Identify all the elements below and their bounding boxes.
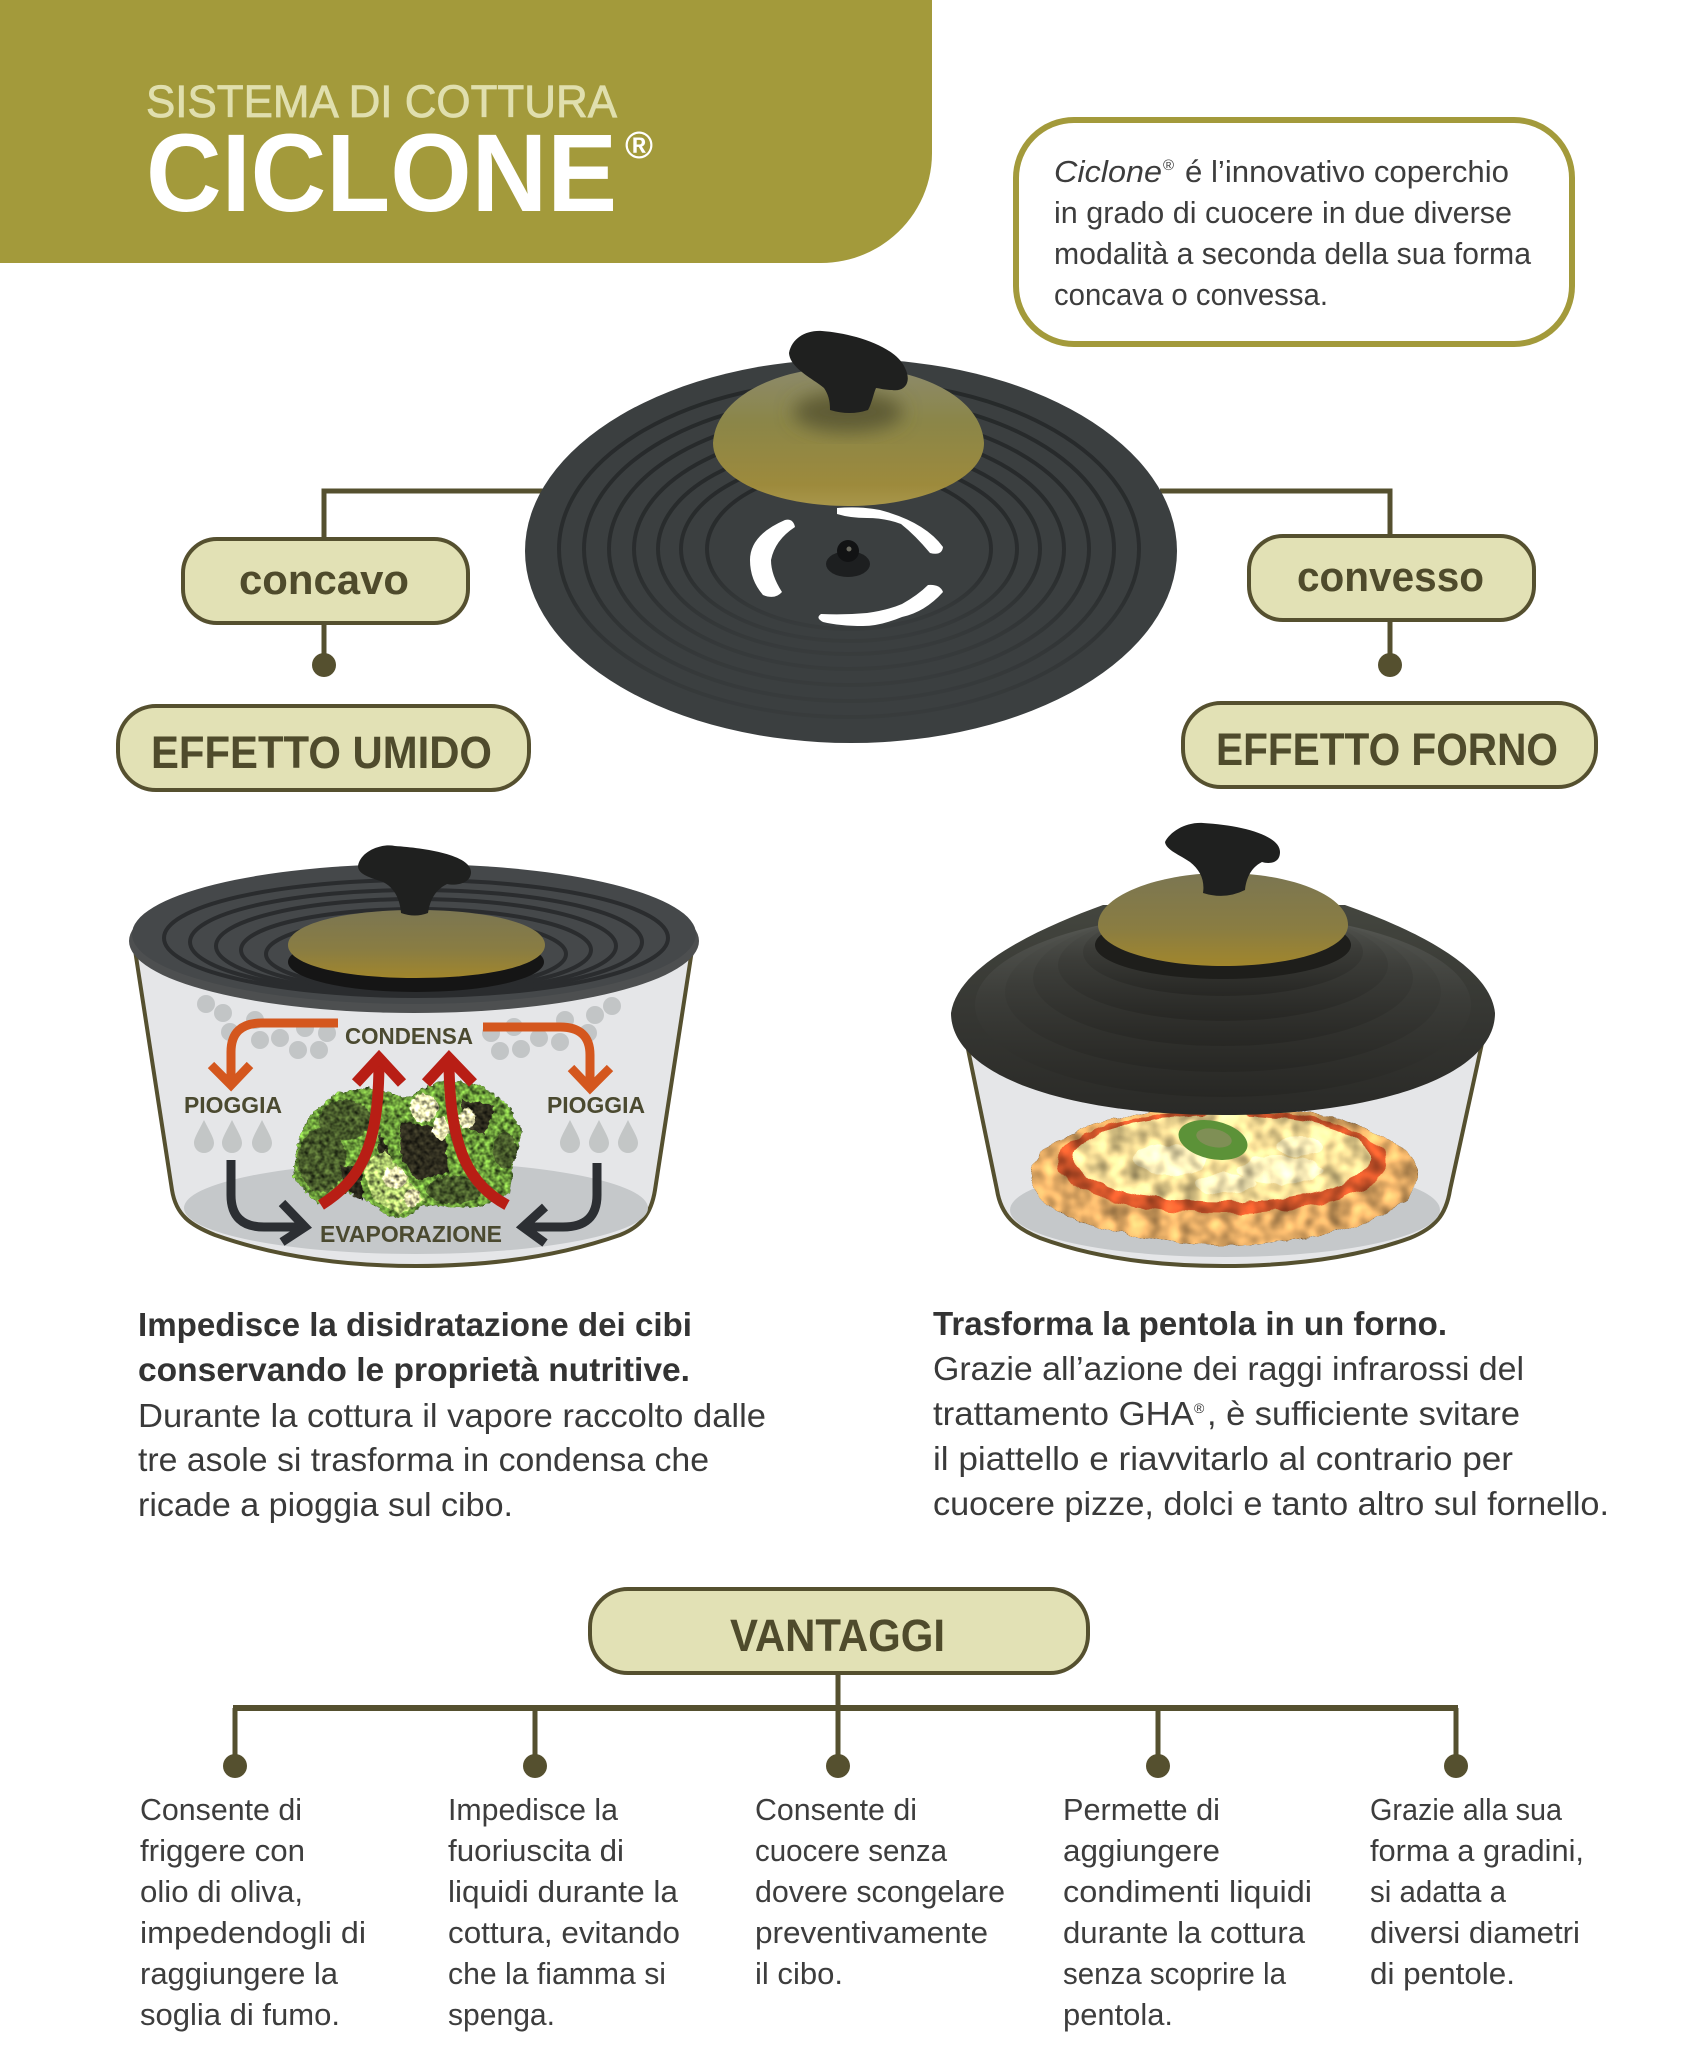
pill: convesso: convesso [1297, 553, 1484, 600]
advantage column 2: fuoriuscita di [448, 1833, 624, 1868]
pill: effetto forno [1183, 703, 1596, 787]
advantage column 1: olio di oliva, [140, 1874, 303, 1909]
plate [1010, 1163, 1440, 1257]
pill: concavo [183, 539, 468, 623]
text block: effetto forno: trattamento GHA [933, 1395, 1194, 1432]
advantage column 3 [755, 1792, 1005, 1991]
advantage column 3: il cibo. [755, 1956, 843, 1991]
advantage column 2: liquidi durante la [448, 1874, 679, 1909]
advantage column 3: dovere scongelare [755, 1874, 1005, 1909]
callout: intro text: concava o convessa. [1054, 277, 1328, 312]
title: ciclone: CICLONE [146, 112, 617, 235]
text block: effetto umido: conservando le proprietà nutritive. [138, 1351, 690, 1388]
steam slots [750, 507, 943, 626]
advantage column 2: che la fiamma si [448, 1956, 666, 1991]
advantage column 2: spenga. [448, 1997, 555, 2032]
advantage column 5: Grazie alla sua [1370, 1792, 1563, 1827]
text block: effetto forno: cuocere pizze, dolci e tanto altro sul fornello. [933, 1485, 1609, 1522]
advantage column 4: senza scoprire la [1063, 1956, 1287, 1991]
text block: effetto forno: Trasforma la pentola in un forno. [933, 1305, 1447, 1342]
pizza [1031, 1106, 1417, 1244]
advantage column 4: durante la cottura [1063, 1915, 1306, 1950]
pot illustration: concave lid [129, 845, 699, 1266]
pill: vantaggi [590, 1589, 1088, 1673]
text block: effetto forno: il piattello e riavvitarlo al contrario per [933, 1440, 1513, 1477]
text block: effetto umido [138, 1306, 766, 1523]
pot illustration: convex lid with pizza [951, 823, 1495, 1266]
text block: effetto umido: Durante la cottura il vapore raccolto dalle [138, 1397, 766, 1434]
text block: effetto umido: ricade a pioggia sul cibo. [138, 1486, 513, 1523]
advantage column 2: cottura, evitando [448, 1915, 680, 1950]
advantage column 4 [1063, 1792, 1312, 2032]
callout: intro text: Ciclone [1054, 154, 1162, 189]
advantage column 4: Permette di [1063, 1792, 1220, 1827]
label: evaporazione: EVAPORAZIONE [320, 1221, 502, 1247]
pill: effetto forno: EFFETTO FORNO [1216, 724, 1558, 775]
text block: effetto umido: tre asole si trasforma in condensa che [138, 1441, 709, 1478]
condensation bubbles [197, 995, 621, 1060]
text block: effetto forno: , è sufficiente svitare [1207, 1395, 1520, 1432]
evaporation arrows [321, 1058, 507, 1205]
callout: intro text: modalità a seconda della sua forma [1054, 236, 1532, 271]
tree connector with dots [223, 1673, 1468, 1778]
advantage column 1: soglia di fumo. [140, 1997, 340, 2032]
connector dot: convesso [1378, 620, 1402, 677]
advantage column 2: Impedisce la [448, 1792, 619, 1827]
label: pioggia right: PIOGGIA [547, 1092, 645, 1118]
liquid disc [184, 1162, 648, 1254]
pill: effetto umido: EFFETTO UMIDO [151, 727, 492, 778]
advantage column 3: Consente di [755, 1792, 917, 1827]
basil leaf [1175, 1114, 1251, 1166]
convex lid [951, 823, 1495, 1115]
advantage column 4: pentola. [1063, 1997, 1173, 2032]
advantage column 4: condimenti liquidi [1063, 1874, 1312, 1909]
advantage column 5: forma a gradini, [1370, 1833, 1584, 1868]
connector: lid to concavo [324, 491, 545, 538]
callout: intro text: in grado di cuocere in due diverse [1054, 195, 1512, 230]
advantage column 1: raggiungere la [140, 1956, 339, 1991]
title: sistema di cottura: SISTEMA DI COTTURA [146, 76, 617, 127]
pill: vantaggi: VANTAGGI [730, 1610, 945, 1661]
glass pot [963, 1025, 1486, 1266]
return arrows [231, 1160, 597, 1243]
callout: intro text: é l’innovativo coperchio [1185, 154, 1509, 189]
rain arrows [211, 1023, 610, 1088]
callout: intro text: ® [1163, 157, 1174, 174]
concave lid [129, 845, 699, 1013]
advantage column 1 [140, 1792, 366, 2032]
label: pioggia left: PIOGGIA [184, 1092, 282, 1118]
dome plate [713, 367, 984, 506]
header banner [0, 0, 932, 263]
connector: lid to convesso [1160, 491, 1390, 535]
advantage column 2 [448, 1792, 680, 2032]
text block: effetto forno: ® [1194, 1400, 1205, 1416]
advantage column 1: impedendogli di [140, 1915, 366, 1950]
broccoli [293, 1080, 522, 1217]
advantage column 5 [1370, 1792, 1584, 1991]
text block: effetto umido: Impedisce la disidratazione dei cibi [138, 1306, 692, 1343]
advantage column 3: preventivamente [755, 1915, 988, 1950]
registered mark: ® [625, 125, 653, 167]
text block: effetto forno [933, 1305, 1609, 1522]
connector dot: concavo [312, 623, 336, 677]
central screw [826, 540, 870, 577]
advantage column 5: si adatta a [1370, 1874, 1507, 1909]
advantage column 1: Consente di [140, 1792, 302, 1827]
callout: intro text [1016, 120, 1572, 344]
advantage column 5: diversi diametri [1370, 1915, 1580, 1950]
advantage column 1: friggere con [140, 1833, 305, 1868]
label: condensa: CONDENSA [345, 1023, 473, 1049]
pill: concavo: concavo [239, 556, 409, 603]
advantage column 3: cuocere senza [755, 1833, 948, 1868]
knob [789, 331, 908, 413]
rain drops [194, 1120, 638, 1153]
pill: convesso [1249, 536, 1534, 620]
advantage column 4: aggiungere [1063, 1833, 1220, 1868]
pill: effetto umido [118, 706, 529, 790]
advantage column 5: di pentole. [1370, 1956, 1515, 1991]
text block: effetto forno: Grazie all’azione dei raggi infrarossi del [933, 1350, 1524, 1387]
lid illustration, top view [525, 331, 1177, 743]
glass pot [135, 950, 692, 1266]
